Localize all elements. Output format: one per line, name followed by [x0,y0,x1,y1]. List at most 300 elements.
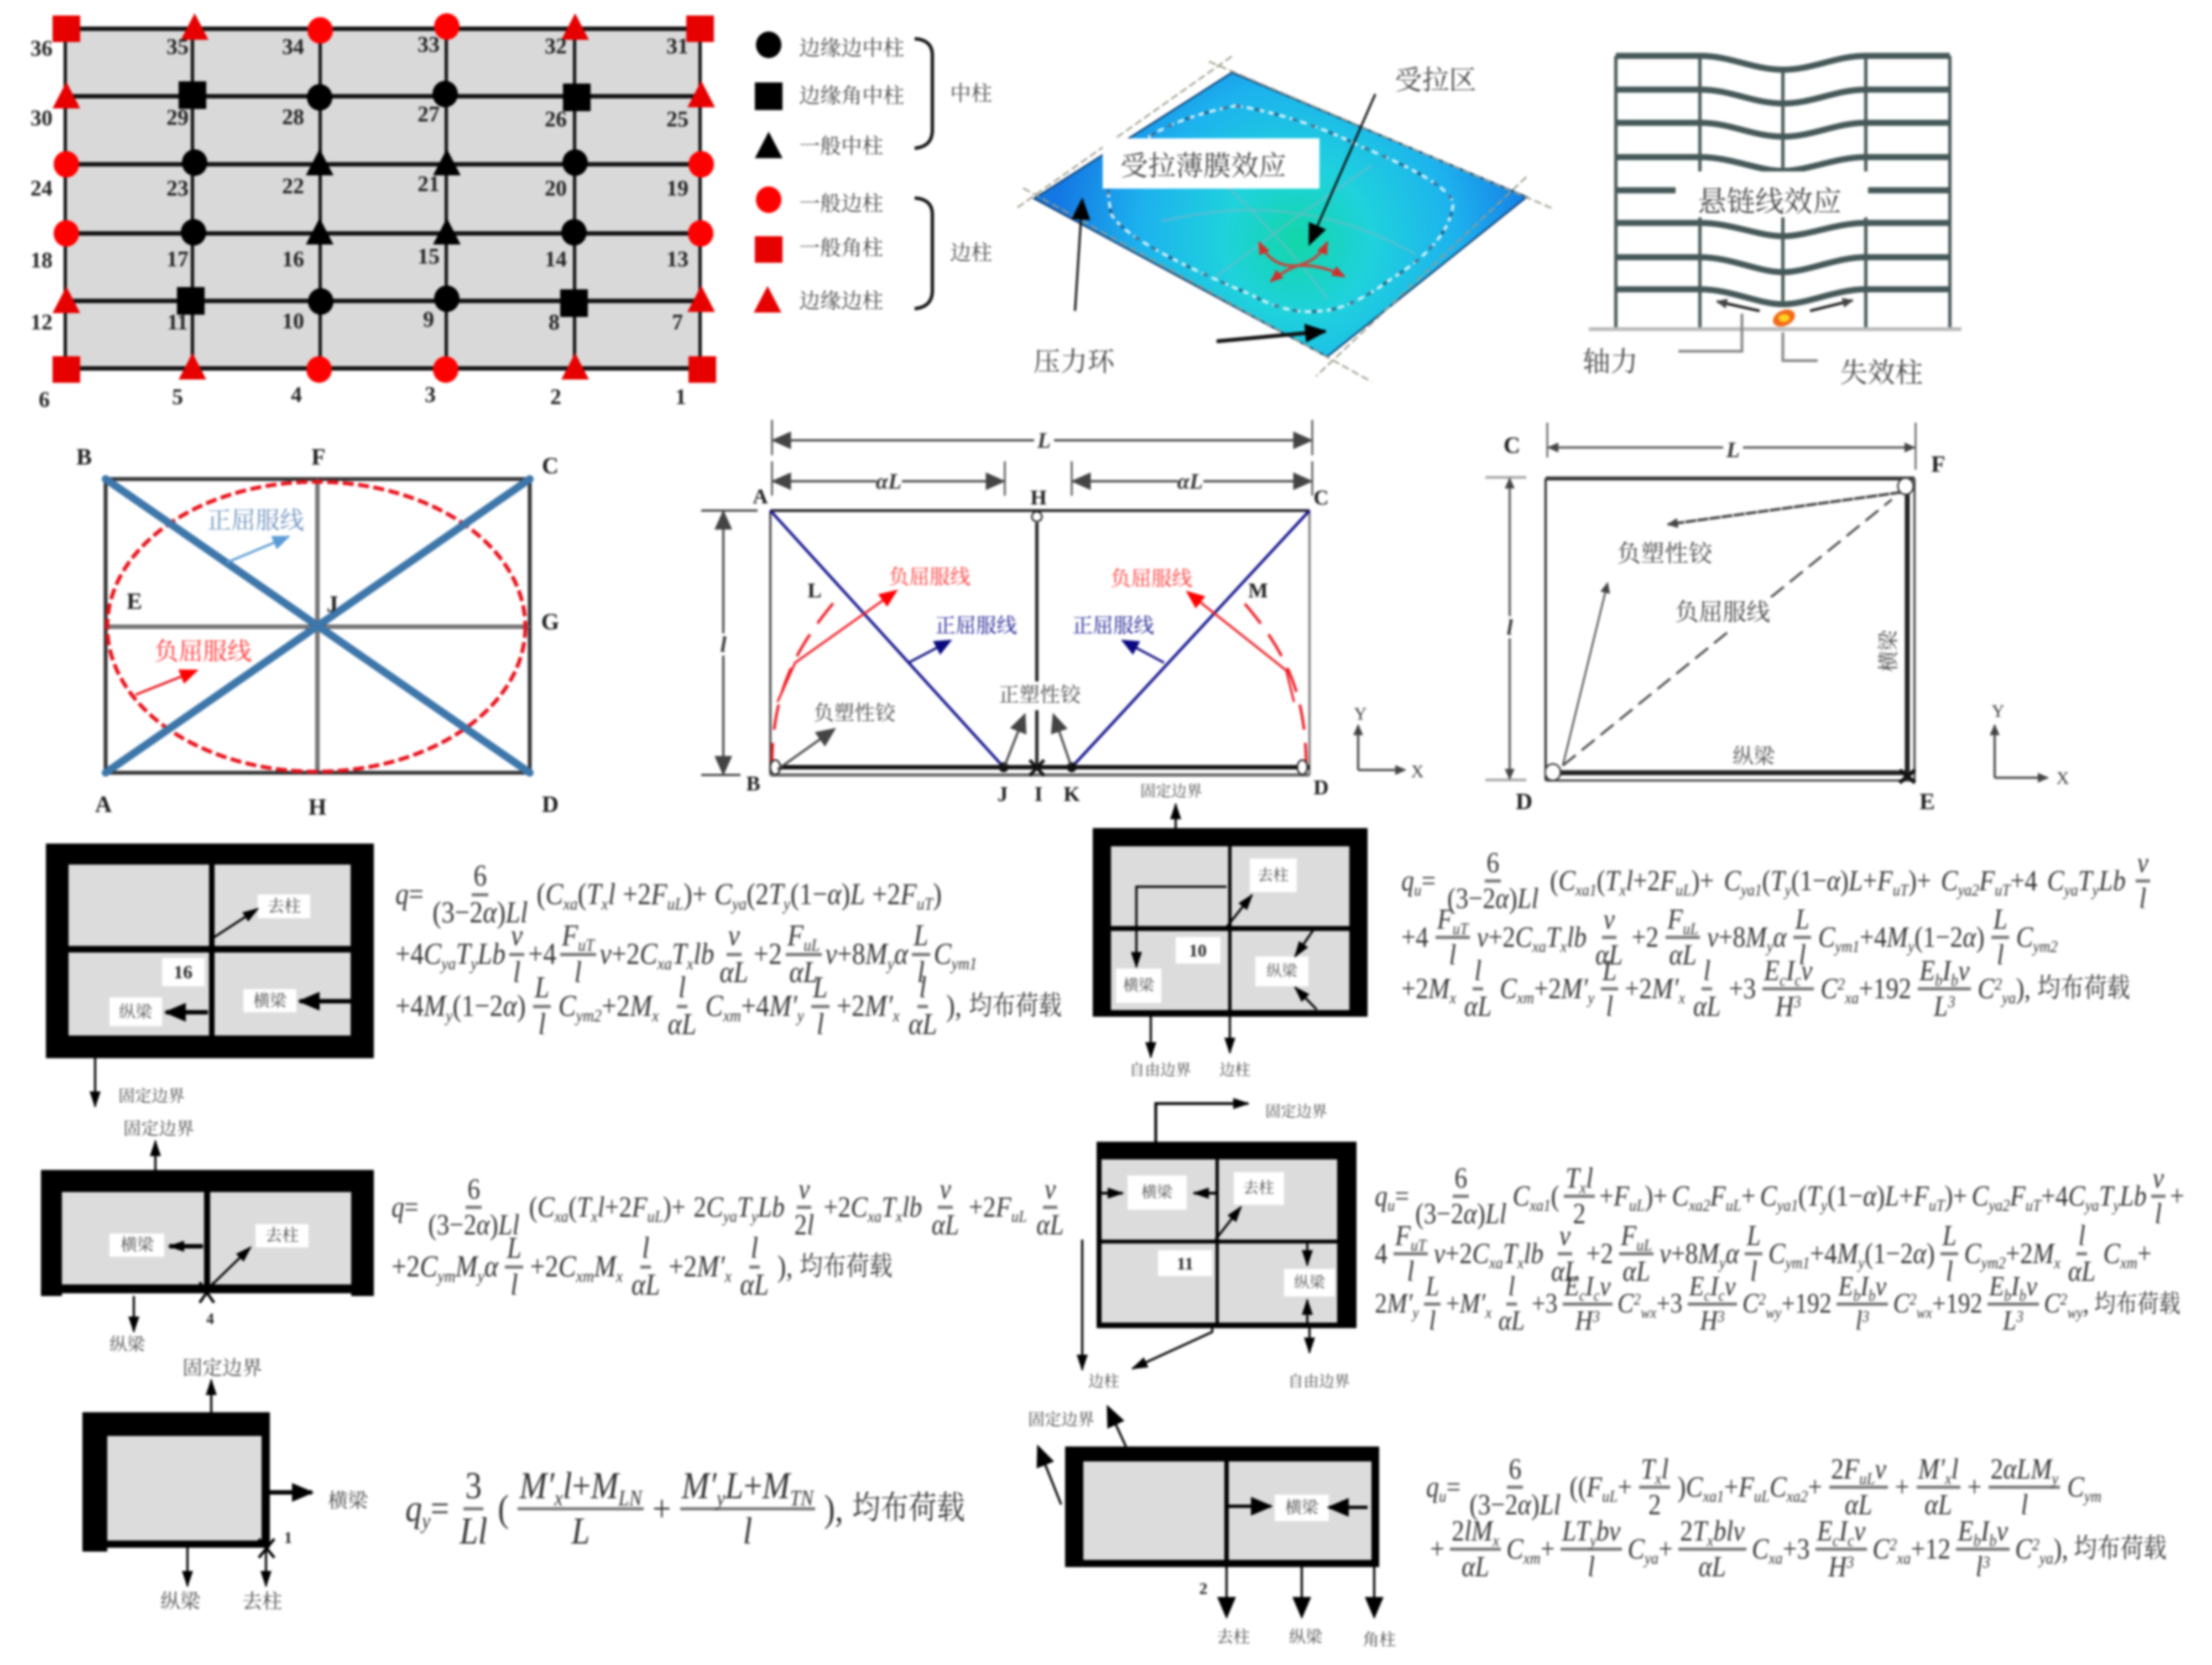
equation: column 4, line 2: 均布荷载 [800,1252,893,1281]
equation: column 16, line 3: +2M′x [837,989,900,1026]
labels: 边柱 [1088,1373,1119,1391]
equation: column 2, line 2: EbIbv [1958,1515,2008,1549]
labels [160,1357,369,1612]
equation: column 2, line 2: 2lMx [1452,1515,1499,1549]
axis labels: X [2056,768,2069,788]
equation: column 11, line 2: FuL [1621,1219,1652,1254]
negative yield ellipse [107,482,525,772]
dimension L [1547,423,1916,470]
equation: column 10, line 1: 6 [1486,846,1499,878]
equation: column 16, line 3: l [679,970,686,1004]
equation: column 10, line 3: +2Mx [1401,972,1456,1007]
labels [118,897,301,1105]
equation: column 4, line 1: 2l [794,1208,814,1240]
equation: column 11, line 2: αL [2068,1255,2096,1287]
equation: column 2, line 2: C2xa+12 [1872,1532,1950,1568]
equation: column 2, line 1: 2αLMy [1990,1453,2058,1487]
slab bays [1111,846,1349,1010]
axis labels [1354,704,1424,781]
equation: column 11, line 2: FuT [1395,1219,1426,1254]
labels: 11 [1177,1253,1193,1273]
equation: column 4, line 1: αL [932,1208,959,1240]
equation: column 16, line 2: +2 [754,937,782,971]
column numbers: 29 [166,105,189,129]
arrows [1082,1104,1310,1370]
column numbers: 19 [666,176,688,200]
equation: column 11, line 2: l [1407,1255,1414,1287]
column numbers: 7 [672,310,683,334]
labels: 纵梁 [1733,745,1776,768]
equation: column 4, line 1: +2FuL [969,1190,1027,1226]
equation: column 1: l [743,1510,752,1552]
bracket labels: 中柱 [950,82,992,106]
column numbers: 25 [666,106,688,132]
column numbers: 24 [30,176,53,200]
bracket labels: 边柱 [950,242,992,265]
negative yield arrows [778,591,1294,702]
node labels: H [309,795,326,820]
removed column mark [200,1282,214,1303]
equation: column 16, line 2: FuT [562,918,594,955]
equation: column 1: + [653,1487,671,1529]
collapsed column mark [1900,770,1915,783]
negative arrow [135,670,197,695]
equation: column 2, line 1: Cym [2067,1470,2101,1506]
equation: column 11, line 2: v+2CxaTxlb [1434,1237,1543,1272]
frame [82,1412,270,1552]
equation: column 11, line 1: Cya2FuT+4CyaTyLb [1971,1179,2147,1215]
positive yield lines [770,511,1310,767]
columns [1616,56,1950,329]
column numbers: 31 [666,33,688,59]
column numbers: 1 [675,384,686,409]
equation: column 16, line 2: l [513,955,520,989]
node labels: D [1313,776,1329,799]
equation: column 2, line 2: EcIcv [1817,1515,1865,1549]
equation: column 10, line 1: (Cxa1(Txl+2FuL)+ [1550,864,1714,899]
arrows [1038,1407,1374,1617]
equation: column 2, line 1: )Cxa1+FuLCxa2+ [1677,1470,1822,1506]
equation: column 11, line 1: Cxa1( [1512,1179,1559,1215]
equation: column 4, line 2: αL [632,1268,660,1302]
column numbers: 27 [418,102,440,126]
equation: column 16, line 3: L [535,970,549,1004]
failed column explosion [1770,306,1798,330]
hinges [1545,478,1913,781]
equation: column 4, line 1: v [799,1173,810,1205]
equation: column 16, line 2: +4CyaTyLb [395,937,505,974]
dimension l [701,511,758,775]
column numbers: 5 [172,384,183,409]
deflected floors [1616,56,1950,304]
equation: column 2, line 1: 2FuLv [1831,1453,1886,1487]
labels [1583,346,1923,388]
equation: column 10, line 2: l [1449,938,1456,970]
arrows to compression ring [1075,200,1325,341]
equation: column 11, line 3: C2wy+192 [1743,1288,1832,1321]
dimension letters: αL [876,469,901,493]
equation: column 11, line 2: l [1946,1255,1953,1287]
labels [1617,541,1901,768]
equation: column 10, line 3: H3 [1775,990,1801,1022]
labels: 固定边界 [1028,1411,1094,1429]
yield line pattern: square slab [76,445,559,820]
equation: column 10, line 3: EbIbv [1919,954,1969,989]
bottom notch [62,1293,351,1296]
node labels: E [127,589,142,615]
equation: column 11, line 3: EcIcv [1689,1271,1735,1304]
equation: column 11, line 3: L3 [2003,1305,2023,1336]
equation: column 2, line 1: ((FuL+ [1569,1470,1632,1506]
equation: column 2, line 1: αL [1924,1488,1952,1520]
equation: column 16, line 1 [394,858,942,930]
labels: 角柱 [1363,1631,1396,1650]
slab bays [1102,1159,1337,1323]
legend labels: 边缘角中柱 [799,85,904,108]
equation: column 11, line 3: L [1426,1271,1439,1302]
equation: column 10, line 1: l [2139,882,2146,914]
equation: column 4, line 1: q= [392,1190,419,1223]
equation: column 16, line 2: αL [789,955,818,989]
equation: column 16, line 1: q= [395,877,424,911]
slab bays [62,1192,351,1284]
beam grid [65,29,700,368]
equation: column 11, line 3: C2wx+3 [1618,1288,1682,1321]
equation: column 1: M′xl+MLN [519,1465,642,1510]
equation: column 11, line 1: 2 [1573,1197,1585,1229]
frame [1065,1447,1379,1567]
axis labels: Y [1991,701,2005,721]
equation: column 4, line 1: +2CxaTxlb [823,1190,922,1226]
arrow to tension zone [1310,94,1375,244]
node labels: A [95,792,112,818]
compression ring label: 压力环 [1033,346,1115,377]
panel: column 10 [1093,782,1368,1079]
dimension letters: l [1506,615,1513,639]
equation: column 16, line 2: l [575,955,582,989]
equation: column 10, line 3: l [1703,954,1710,986]
equation: column 10, line 2 [1401,903,2059,970]
equation: column 4, line 2: ), [778,1250,793,1283]
labels: 横梁 [253,992,288,1010]
equation: column 11, line 2: 4 [1375,1237,1387,1269]
equation: column 4, line 1: 6 [467,1173,480,1205]
equation: column 4, line 1: v [1045,1173,1056,1205]
node labels: C [1504,433,1520,459]
column numbers: 11 [167,310,188,334]
equation: column 11, line 3: 2M′y [1375,1288,1419,1321]
equation: column 2, line 1: qu= [1426,1470,1460,1506]
column numbers: 32 [545,33,567,59]
equation: column 11, line 3: +3 [1532,1288,1557,1319]
equation: column 1 [405,1465,966,1552]
equation: column 2, line 1: (3−2α)Ll [1469,1488,1561,1520]
panel: column 16 [46,844,374,1106]
catenary effect diagram [1583,56,1961,388]
equation: column 11, line 2: v [1559,1219,1571,1251]
equation: column 16, line 2 [395,918,977,989]
column numbers: 21 [418,171,440,196]
equation: column 1: qy= [405,1487,449,1533]
node labels: M [1248,579,1268,602]
node labels: C [1313,486,1329,509]
column numbers: 26 [545,106,567,132]
label boxes [1116,858,1308,1003]
equation: column 11, line 2: L [1942,1219,1957,1251]
labels [1028,1411,1396,1650]
slab bays [1083,1461,1371,1560]
equation: column 16, line 3: Cym2+2Mx [559,989,659,1026]
bracket labels [950,82,992,265]
equation: column 16, line 2: L [914,918,928,952]
labels: 横梁 [328,1490,369,1512]
dimension letters [1504,437,1743,639]
positive yield label: 正屈服线 [207,507,304,534]
arrows [134,1141,251,1331]
equation: column 2, line 1: + [1895,1470,1910,1503]
legend symbols [754,32,782,313]
equation: column 11, line 3: 均布荷载 [2094,1290,2180,1318]
labels: 边柱 [1219,1061,1250,1079]
equation: column 2, line 1: l [2021,1488,2028,1520]
equation: column 10, line 1: Cya2FuT+4 [1941,864,2037,899]
equation: column 2, line 2: 均布荷载 [2074,1534,2167,1563]
equation: column 4, line 2 [392,1231,894,1302]
column numbers: 33 [418,32,440,56]
labels: 负屈服线 [1675,600,1770,626]
axis labels [1991,701,2069,788]
equation: column 10, line 2: FuL [1667,903,1698,938]
equation: column 16, line 3: l [538,1007,546,1041]
equation: column 4, line 1: αL [1036,1208,1064,1240]
yield line pattern: edge panel [701,420,1424,806]
frame [46,844,374,1058]
equation: column 10, line 2: αL [1669,938,1697,970]
labels: 去柱 [1258,866,1288,884]
equation: column 10, line 1: CyaTyLb [2047,864,2126,899]
equation: column 16, line 3: 均布荷载 [969,992,1062,1021]
white label: catenary effect [1678,171,1868,217]
legend: column types [754,32,992,313]
ground [1589,327,1961,331]
equation: column 10, line 2: FuT [1437,903,1468,938]
labels: 自由边界 [1288,1373,1350,1391]
equation: column 2, line 2: + [1430,1532,1444,1565]
equation: column 10, line 2: l [1799,938,1806,970]
labels: 16 [174,962,192,982]
labels: 去柱 [1243,1179,1274,1197]
labels: 去柱 [268,897,301,916]
node labels: D [1516,789,1532,815]
slab frame [1546,478,1914,781]
panel: column 4 [41,1118,374,1354]
equation: column 10, line 2: v [1604,903,1615,935]
labels: 固定边界 [1140,782,1202,800]
equation: column 4, line 1: (Cxa(Txl+2FuL)+ [529,1190,686,1226]
leader lines [1678,314,1818,361]
yield labels: 负屈服线 [889,565,971,589]
equation: column 2, line 2: 2Txblv [1680,1515,1745,1549]
equation: column 2, line 1 [1425,1453,2103,1522]
equation: column 11, line 3: EbIbv [1989,1271,2037,1304]
equation: column 10, line 1: v [2137,846,2148,878]
equation: column 11, line 1: Cya1(Ty(1−α)L+FuT)+ [1760,1179,1967,1215]
equation: column 4, line 2: αL [740,1268,769,1302]
equation: column 4, line 2: +2CymMyα [392,1250,498,1287]
equation: column 10, line 3: +2M′x [1625,972,1685,1007]
column numbers: 17 [166,247,189,271]
equation: column 10, line 3: +3 [1729,972,1756,1005]
node labels: I [1035,783,1042,806]
label backgrounds [1673,597,1772,628]
frame and mid beams [106,479,530,773]
membrane effect diagram [1018,55,1554,382]
dimension L [772,420,1312,455]
panel: column 1 [82,1357,369,1612]
equation: column 10, line 2: Cym1+4My(1−2α) [1818,920,1985,956]
equation: column 16, line 2: +4 [528,937,556,971]
dimension letters: L [1726,437,1740,462]
column numbers: 4 [291,382,302,407]
equation: column 11, line 2 [1374,1219,2152,1287]
equation: column 16, line 3: l [919,970,926,1004]
equation: column 16, line 2: v+2CxaTxlb [599,937,714,974]
white label: tension membrane effect [1103,138,1319,189]
equation: column 11, line 1: + [2170,1179,2184,1212]
outer dashed boundary [1018,55,1554,382]
equation: column 10, line 2: Cym2 [2016,920,2058,956]
equation: column 10, line 3: EcIcv [1764,954,1812,989]
bracket: middle columns [915,39,932,148]
tension zone label: 受拉区 [1395,65,1477,95]
column numbers: 13 [666,247,688,271]
panel: column 11 [1082,1103,1357,1391]
equation: column 1: ), [824,1487,843,1529]
labels: 横梁 [121,1236,155,1255]
labels: 固定边界 [118,1088,185,1105]
compression ring [1108,106,1453,311]
equation: column 11, line 3: EbIbv [1838,1271,1886,1304]
equation: column 1: L [571,1510,590,1552]
equation: column 10, line 1: (3−2α)Ll [1447,882,1538,914]
column numbers: 8 [549,310,560,334]
hinge pointer arrows [778,715,1071,769]
negative yield label: 负屈服线 [154,638,252,665]
equation: column 11, line 3: H3 [1700,1305,1725,1336]
label boxes [109,894,310,1026]
equation: column 11, line 2: Cym2+2Mx [1964,1237,2060,1272]
equation: column 10, line 3: αL [1464,990,1492,1022]
equation: column 11, line 2: +2 [1586,1237,1613,1269]
equation: column 16, line 3: ), [946,989,962,1023]
hinges [770,512,1307,774]
label text: 受拉薄膜效应 [1120,150,1286,181]
equation: column 11, line 2: v+8Myα [1660,1237,1739,1272]
node labels [746,485,1329,806]
column numbers: 36 [30,35,53,61]
equation: column 10, line 3: Cxm+2M′y [1500,972,1594,1007]
positive yield arrows [909,641,1164,663]
equation: column 11, line 3: αL [1499,1305,1525,1336]
equation: column 16, line 2: l [917,955,925,989]
equation: column 11, line 3: l [1429,1305,1436,1336]
column numbers [30,32,688,412]
equation: column 16, line 3: L [813,970,828,1004]
labels: 去柱 [242,1590,282,1612]
node labels: E [1919,789,1935,815]
yield labels: 正屈服线 [1072,614,1154,637]
equation: column 10, line 3 [1401,954,2131,1022]
equation: column 11, line 1: 6 [1454,1162,1467,1194]
equation: column 16, line 3: αL [909,1007,937,1041]
equation: column 11, line 2: l [1750,1255,1757,1287]
slab bays [69,865,351,1036]
equation: column 16, line 1: 6 [473,858,487,892]
arrows [187,1380,312,1586]
equation: column 16, line 1: +2FuT) [872,877,942,914]
negative yield dashes [772,596,1306,768]
labels: 固定边界 [123,1118,194,1138]
equation: column 16, line 1: +2FuL)+ [623,877,707,914]
equation: column 2, line 2: l3 [1976,1550,1990,1582]
equation: column 2, line 1: Txl [1641,1453,1668,1487]
equation: column 10, line 2: L [1795,903,1809,935]
equation: column 16, line 2: FuL [787,918,820,955]
equation: column 11, line 1: +FuL)+ [1599,1179,1667,1215]
slab bay [107,1436,262,1541]
equation: column 11, line 2: l [2078,1219,2085,1251]
column numbers: 18 [30,248,53,272]
equation: column 11, line 1: (3−2α)Ll [1415,1197,1506,1229]
equation: column 4, line 1: v [940,1173,951,1205]
labels: 横梁 [1285,1499,1319,1517]
labels [1088,1103,1350,1391]
equation: column 2, line 2: l [1588,1550,1595,1582]
positive yield lines [106,479,530,773]
equation: column 11, line 1: v [2153,1162,2164,1194]
equation: column 16, line 2: v [728,918,740,952]
labels: 纵梁 [1266,962,1298,980]
labels: 10 [1189,940,1207,960]
equation: column 2, line 2: Cxa+3 [1752,1532,1810,1568]
frame [1093,828,1368,1017]
red tension arrows [1259,242,1344,282]
slab frame [770,511,1310,775]
equation: column 10, line 2: v+8Myα [1707,920,1787,956]
equation: column 10, line 2: l [1997,938,2004,970]
equation: column 11, line 1: Txl [1566,1162,1593,1196]
column markers [53,13,716,383]
label boxes [109,1224,309,1257]
legend labels: 边缘边柱 [799,290,883,313]
label boxes [1128,1172,1335,1297]
equation: column 11, line 1: qu= [1375,1179,1409,1215]
equation: column 10, line 3: C2ya), [1978,972,2031,1007]
equation: column 10, line 3: L [1603,954,1616,986]
column numbers: 16 [282,247,304,271]
equation: column 16, line 3: αL [668,1007,696,1041]
equation: column 10, line 2: +4 [1401,920,1428,953]
equation: column 2, line 2: Cxm+ [1506,1532,1555,1568]
equation: column 11, line 2: αL [1551,1255,1579,1287]
frame [41,1170,374,1296]
axis labels: Y [1354,704,1367,724]
equation: column 11, line 3: C2wx+192 [1893,1288,1983,1321]
equation: column 4, line 1: (3−2α)Ll [428,1208,519,1240]
labels: 纵梁 [1289,1628,1323,1646]
equation: column 16, line 3: +4My(1−2α) [395,989,526,1026]
labels: 负塑性铰 [1617,541,1713,568]
